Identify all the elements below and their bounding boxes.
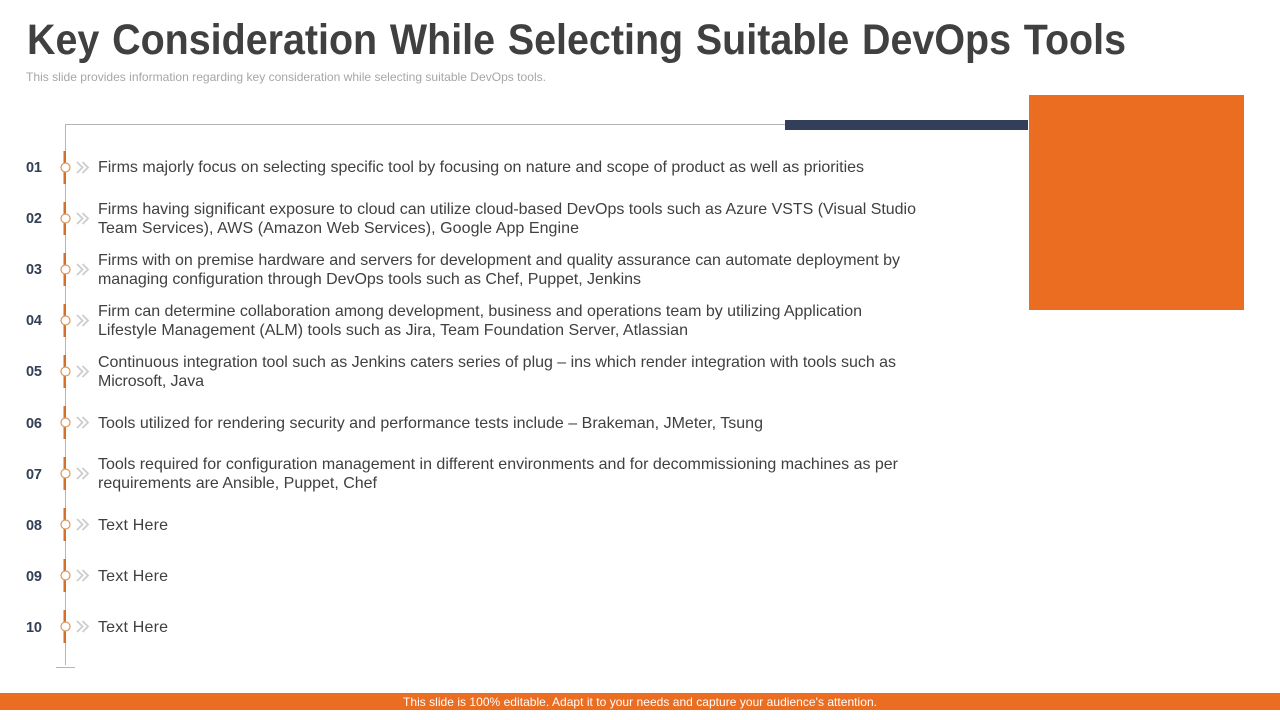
item 05 — [26, 354, 896, 390]
subtitle: This slide provides information regarding key consideration while selecting suitable DevOps tools. — [26, 70, 546, 84]
item 03: 03 — [26, 262, 42, 278]
item 10: 10 — [26, 620, 42, 636]
item 08: Text Here — [98, 517, 168, 534]
title: Key Consideration While Selecting Suitable DevOps Tools — [27, 16, 1126, 64]
item 03: managing configuration through DevOps tools such as Chef, Puppet, Jenkins — [98, 271, 641, 288]
item 07: requirements are Ansible, Puppet, Chef — [98, 475, 378, 492]
item 06: Tools utilized for rendering security and performance tests include – Brakeman, JMeter, Tsung — [98, 415, 763, 432]
item 01 — [26, 151, 864, 184]
orange image placeholder panel — [1029, 95, 1244, 310]
navy accent bar — [785, 120, 1028, 130]
item 02: Firms having significant exposure to cloud can utilize cloud-based DevOps tools such as Azure VSTS (Visual Studio — [98, 201, 916, 218]
item 09: Text Here — [98, 568, 168, 585]
item 01: Firms majorly focus on selecting specific tool by focusing on nature and scope of product as well as priorities — [98, 159, 864, 176]
item 04: 04 — [26, 313, 42, 329]
item 04: Firm can determine collaboration among development, business and operations team by utilizing Application — [98, 303, 862, 320]
item 09: 09 — [26, 569, 42, 585]
item 04: Lifestyle Management (ALM) tools such as Jira, Team Foundation Server, Atlassian — [98, 322, 688, 339]
item 03 — [26, 252, 900, 288]
timeline frame — [56, 124, 785, 668]
item 05: 05 — [26, 364, 42, 380]
timeline list — [26, 151, 916, 643]
footer banner — [0, 693, 1280, 710]
item 07 — [26, 456, 899, 492]
item 10 — [26, 610, 168, 643]
item 05: Microsoft, Java — [98, 373, 204, 390]
item 06: 06 — [26, 416, 42, 432]
item 10: Text Here — [98, 619, 168, 636]
item 07: 07 — [26, 467, 42, 483]
item 04 — [26, 303, 862, 339]
item 01: 01 — [26, 160, 42, 176]
footer banner: This slide is 100% editable. Adapt it to your needs and capture your audience's attention. — [403, 695, 877, 709]
item 02: Team Services), AWS (Amazon Web Services), Google App Engine — [98, 220, 579, 237]
item 08: 08 — [26, 518, 42, 534]
item 03: Firms with on premise hardware and servers for development and quality assurance can automate deployment by — [98, 252, 900, 269]
item 02: 02 — [26, 211, 42, 227]
item 02 — [26, 201, 916, 237]
item 06 — [26, 406, 763, 439]
item 05: Continuous integration tool such as Jenkins caters series of plug – ins which render integration with tools such as — [98, 354, 896, 371]
item 08 — [26, 508, 168, 541]
item 07: Tools required for configuration management in different environments and for decommissioning machines as per — [98, 456, 899, 473]
item 09 — [26, 559, 168, 592]
